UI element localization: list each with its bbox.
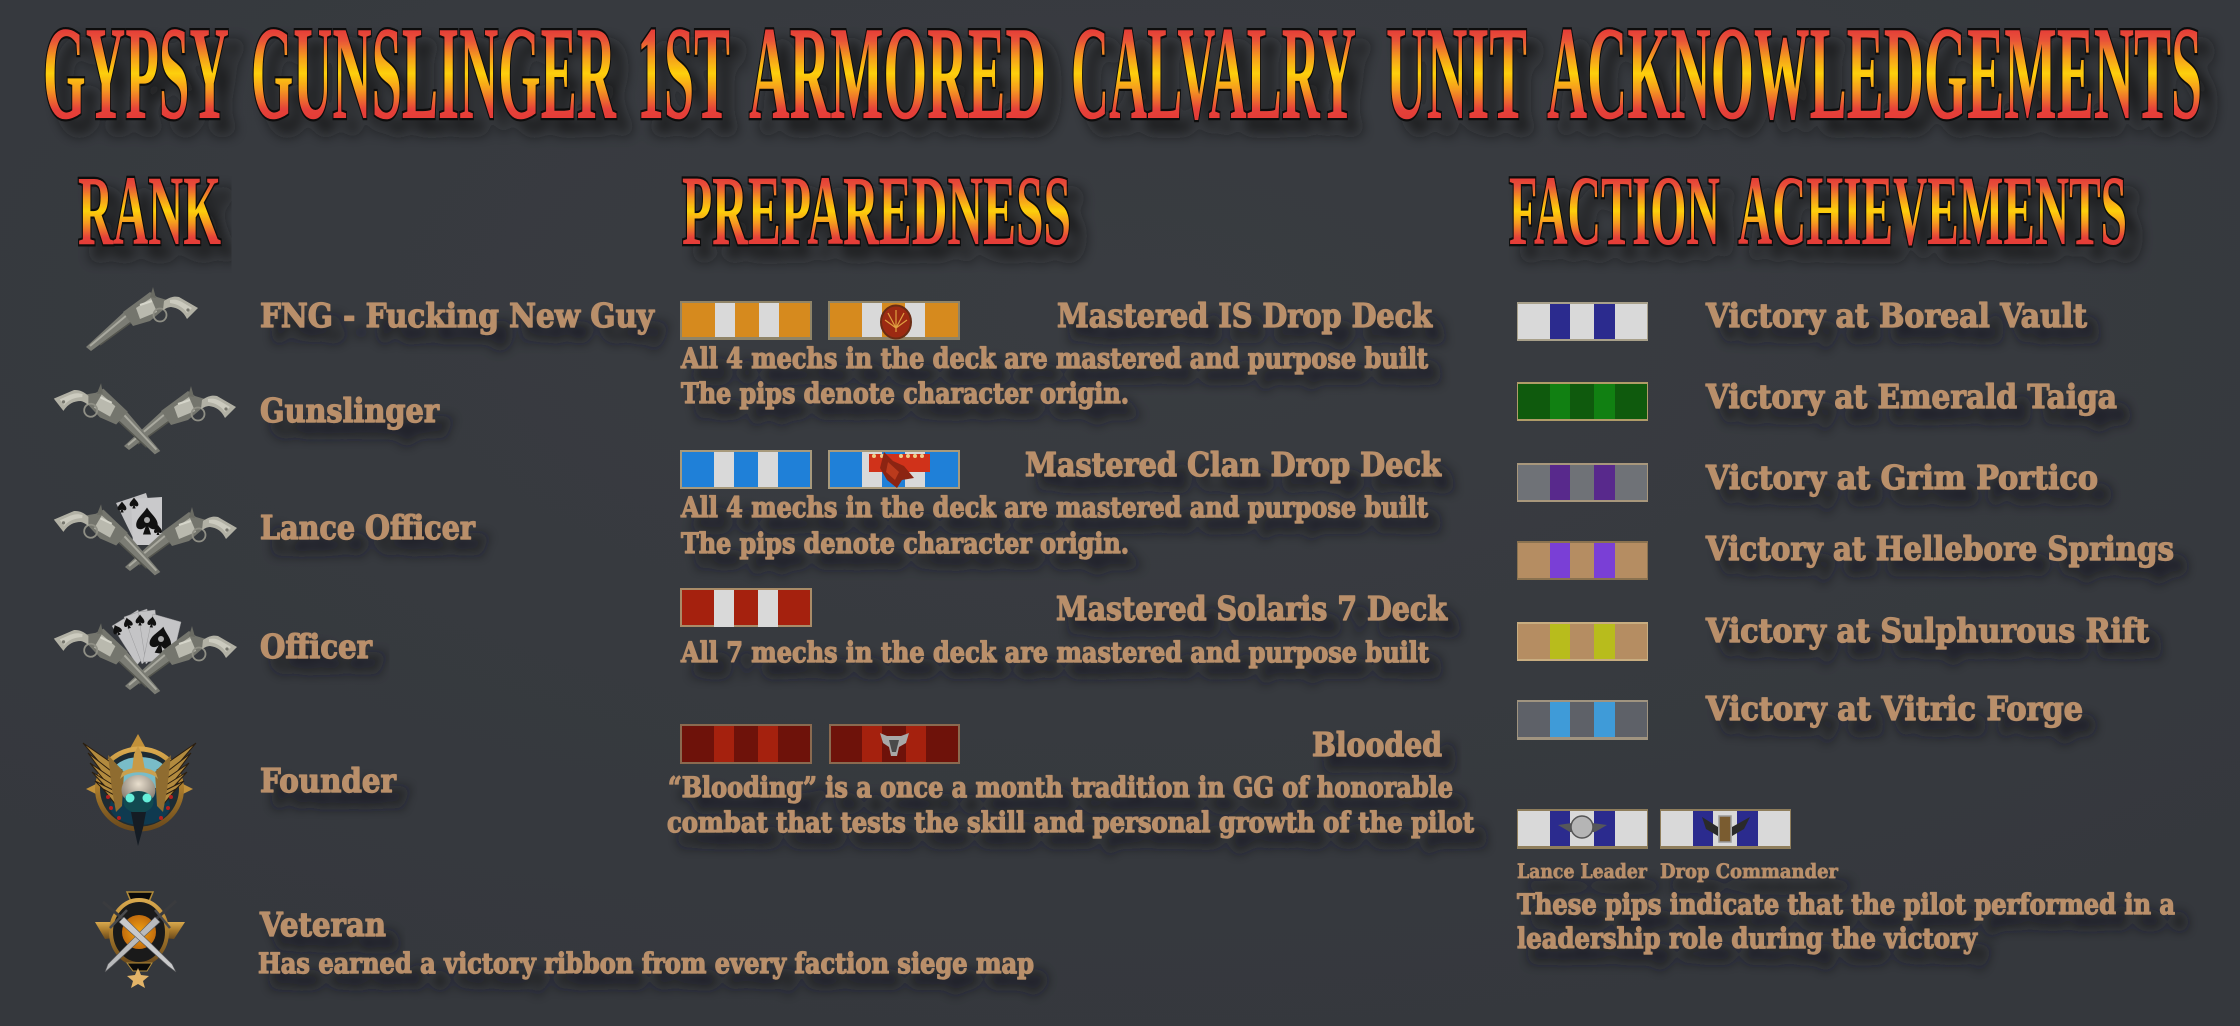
icon: revolvers with two cards — [49, 493, 237, 576]
title: 1ST — [637, 0, 730, 147]
panel: preparedness — [667, 155, 1474, 839]
ribbon: Boreal Vault — [1517, 302, 1648, 341]
ribbon: Solaris — [680, 588, 812, 627]
label: Boreal Vault: Victory at Boreal Vault — [1705, 296, 2088, 335]
label: lance leader: Lance Leader — [1517, 859, 1647, 883]
ribbon: blooded — [680, 724, 812, 764]
label: Hellebore Springs: Victory at Hellebore Springs — [1705, 529, 2174, 568]
title: UNIT — [1386, 0, 1527, 147]
icon: single revolver — [86, 287, 198, 351]
ribbon: Emerald Taiga — [1517, 382, 1648, 421]
ribbon: Clan with wolf pin — [828, 450, 960, 489]
title — [43, 0, 2202, 147]
ribbon: IS — [680, 301, 812, 340]
text: IS description: All 4 mechs in the deck are mastered and purpose built — [680, 342, 1428, 375]
label: mastered Solaris: Mastered Solaris 7 Deck — [1056, 589, 1448, 628]
panel: rank: RANK — [78, 155, 221, 266]
text: Clan description — [680, 491, 1428, 560]
ribbon: Vitric Forge — [1517, 700, 1648, 740]
label: Lance Officer: Lance Officer — [260, 508, 476, 547]
text: blooded description: “Blooding” is a once a month tradition in GG of honorable — [668, 771, 1453, 804]
label: FNG: FNG - Fucking New Guy — [260, 296, 655, 335]
text: blooded description — [667, 771, 1474, 839]
ribbon: Grim Portico — [1517, 463, 1648, 502]
icon: crossed revolvers — [49, 378, 236, 455]
text: IS description — [680, 342, 1428, 410]
label: Officer: Officer — [260, 627, 373, 666]
text: blooded description: combat that tests the skill and personal growth of the pilot — [667, 806, 1474, 839]
panel: preparedness: PREPAREDNESS — [682, 155, 1071, 266]
heading: faction achievements: FACTION — [1509, 155, 1720, 266]
title: CALVALRY — [1071, 0, 1356, 147]
icon: veteran crossed swords badge — [95, 892, 185, 988]
ribbon: drop commander — [1660, 809, 1791, 849]
ribbon: Hellebore Springs — [1517, 541, 1648, 580]
ribbon: lance leader — [1517, 809, 1648, 849]
text: leadership pips description: leadership role during the victory — [1517, 922, 1978, 955]
icon: founder skull badge — [83, 734, 196, 846]
label: drop commander: Drop Commander — [1660, 859, 1838, 883]
title: GUNSLINGER — [251, 0, 616, 147]
label: Emerald Taiga: Victory at Emerald Taiga — [1705, 377, 2117, 416]
panel: rank — [49, 155, 1034, 988]
ribbon: blooded with wolf pin — [829, 724, 960, 764]
text: leadership pips description — [1517, 888, 2175, 955]
text: Clan description: All 4 mechs in the deck are mastered and purpose built — [680, 491, 1428, 524]
label: mastered Clan: Mastered Clan Drop Deck — [1025, 445, 1442, 484]
label: Sulphurous Rift: Victory at Sulphurous Rift — [1705, 611, 2150, 650]
panel: faction achievements — [1509, 155, 2175, 955]
label: Vitric Forge: Victory at Vitric Forge — [1705, 689, 2083, 728]
ribbon: Clan — [680, 450, 812, 489]
icon: revolvers with card fan — [49, 609, 237, 695]
label: Grim Portico: Victory at Grim Portico — [1705, 458, 2098, 497]
text: Clan description: The pips denote character origin. — [681, 527, 1129, 560]
title: GYPSY — [43, 0, 229, 147]
ribbon: IS with seal pin — [828, 301, 960, 340]
text: Solaris description: All 7 mechs in the deck are mastered and purpose built — [680, 636, 1429, 669]
label: mastered IS: Mastered IS Drop Deck — [1057, 296, 1433, 335]
text: IS description: The pips denote character origin. — [681, 377, 1129, 410]
ribbon: Sulphurous Rift — [1517, 622, 1648, 661]
label: blooded: Blooded — [1312, 725, 1442, 764]
note: veteran: Has earned a victory ribbon from every faction siege map — [258, 947, 1034, 980]
label: Gunslinger: Gunslinger — [260, 391, 440, 430]
label: Founder: Founder — [260, 761, 397, 800]
title: ARMORED — [749, 0, 1046, 147]
label: Veteran: Veteran — [259, 905, 386, 944]
